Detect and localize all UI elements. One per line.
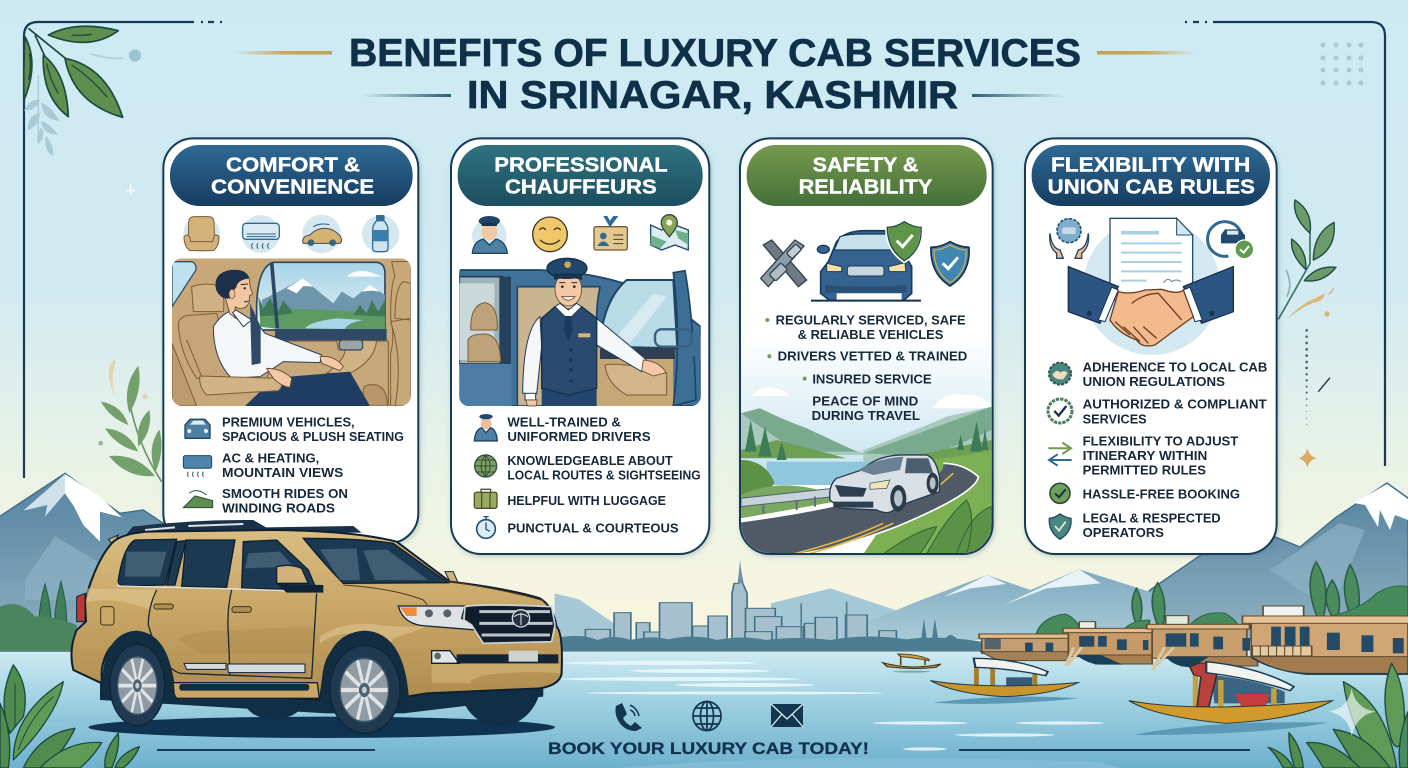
card 4 header: [1032, 145, 1270, 206]
bullet: luggage: [474, 489, 666, 508]
card 3 list: & RELIABLE VEHICLES: [798, 327, 943, 342]
left mountain: [0, 473, 173, 653]
card 4 header: FLEXIBILITY WITH: [1051, 153, 1250, 176]
large shikara: [1129, 662, 1332, 735]
card 1 header: [170, 145, 413, 206]
bullet: legal: LEGAL & RESPECTED: [1083, 511, 1221, 526]
bullet: hassle-free: [1050, 483, 1240, 503]
card 3 header: [747, 145, 987, 206]
bullet: premium vehicles: [185, 415, 404, 444]
card 4 header: UNION CAB RULES: [1048, 175, 1255, 198]
bullet: smooth rides: SMOOTH RIDES ON: [222, 486, 348, 501]
card 1 header: COMFORT &: [226, 153, 360, 176]
card 4 list: [1048, 360, 1268, 540]
icon: globe: [693, 701, 721, 730]
card 1: comfort and convenience: [163, 138, 418, 543]
blue shield icon: [931, 242, 969, 286]
right sprig and accents: [1278, 200, 1336, 468]
white sedan on road: [830, 455, 940, 513]
card 2 header: CHAUFFEURS: [505, 175, 657, 198]
bullet: authorized: SERVICES: [1083, 411, 1147, 426]
luxury SUV: [71, 520, 562, 738]
card 3 list: DRIVERS VETTED & TRAINED: [778, 349, 968, 364]
card 1 header: CONVENIENCE: [211, 175, 374, 198]
bullet: flexibility arrows: [1048, 434, 1238, 477]
bullet: authorized: AUTHORIZED & COMPLIANT: [1083, 397, 1267, 412]
card 4: flexibility with union cab rules: [1025, 138, 1277, 554]
suv front grille and lights: [398, 605, 560, 683]
bullet: knowledgeable: LOCAL ROUTES & SIGHTSEEING: [507, 467, 701, 482]
top-left leaves: [24, 26, 141, 194]
lake: [0, 652, 1408, 768]
card 2 header: PROFESSIONAL: [494, 153, 668, 176]
bullet: authorized: [1048, 397, 1267, 426]
title: BENEFITS OF LUXURY CAB SERVICES: [349, 32, 1081, 75]
bullet: ac and heating: AC & HEATING,: [222, 450, 319, 465]
card 3 list: PEACE OF MIND: [812, 394, 919, 409]
bullet: flexibility arrows: PERMITTED RULES: [1083, 462, 1206, 477]
bullet: ac and heating: [183, 450, 343, 480]
card 1 cabin illustration: [172, 258, 411, 406]
bullet: adherence: ADHERENCE TO LOCAL CAB: [1083, 360, 1268, 375]
card 1 icon row: [183, 215, 399, 253]
bullet: knowledgeable: [475, 453, 701, 482]
bullet: premium vehicles: PREMIUM VEHICLES,: [222, 415, 355, 430]
shikara boats: [883, 654, 1332, 735]
card 2 chauffeur illustration: [459, 258, 701, 406]
bullet: adherence: UNION REGULATIONS: [1083, 374, 1225, 389]
card 2 icon row: [472, 215, 688, 253]
bullet: smooth rides: [183, 486, 348, 515]
chauffeur figure: [523, 258, 666, 406]
bullet: punctual: [477, 517, 679, 538]
houseboats: [979, 562, 1408, 675]
card 3 header: SAFETY &: [813, 153, 918, 176]
bullet: well-trained: UNIFORMED DRIVERS: [507, 429, 651, 444]
suv rear wheel: [102, 631, 175, 726]
right mountains: [1110, 483, 1408, 640]
card 3 header: RELIABILITY: [799, 175, 933, 198]
card 3 list: [765, 313, 968, 423]
bullet: flexibility arrows: FLEXIBILITY TO ADJUST: [1083, 434, 1238, 449]
card 3 list: REGULARLY SERVICED, SAFE: [776, 313, 966, 328]
icon: phone: [615, 703, 642, 731]
small shikara: [883, 654, 941, 673]
left mid sprig: [98, 360, 162, 482]
bullet: flexibility arrows: ITINERARY WITHIN: [1083, 448, 1207, 463]
union hands icon: [1050, 219, 1089, 258]
bullet: well-trained: [474, 414, 651, 444]
booking text: BOOK YOUR LUXURY CAB TODAY!: [548, 739, 869, 758]
bullet: luggage: HELPFUL WITH LUGGAGE: [507, 493, 666, 508]
bullet: hassle-free: HASSLE-FREE BOOKING: [1083, 486, 1240, 501]
card 3: safety and reliability: [740, 138, 993, 554]
bullet: adherence: [1049, 360, 1268, 389]
suv front wheel: [321, 631, 409, 733]
title: IN SRINAGAR, KASHMIR: [467, 74, 958, 117]
left trees and hills: [0, 582, 77, 652]
card 2 header: [458, 145, 703, 206]
call to action: [157, 701, 1250, 758]
seatbelt icon: [761, 240, 807, 287]
bottom-left foliage: [0, 665, 139, 768]
card 2 list: [474, 414, 701, 538]
skyline and far mountains: [555, 560, 1155, 652]
card 3 list: INSURED SERVICE: [812, 371, 932, 386]
bullet: premium vehicles: SPACIOUS & PLUSH SEATING: [222, 429, 404, 444]
bullet: smooth rides: WINDING ROADS: [222, 500, 335, 515]
decorative dot grid: [1320, 42, 1364, 86]
card 2: professional chauffeurs: [451, 138, 709, 554]
bullet: punctual: PUNCTUAL & COURTEOUS: [507, 520, 679, 535]
decorative frame: [24, 22, 1385, 478]
bullet: well-trained: WELL-TRAINED &: [507, 415, 621, 430]
title: [235, 32, 1195, 117]
medium shikara: [930, 658, 1079, 704]
sedan icon with shield: [811, 221, 922, 301]
bullet: legal: OPERATORS: [1083, 525, 1164, 540]
bottom-right foliage: [1268, 663, 1408, 768]
card 3 list: DURING TRAVEL: [812, 408, 920, 423]
card 3 landscape illustration: [741, 337, 993, 554]
bullet: knowledgeable: KNOWLEDGEABLE ABOUT: [507, 453, 673, 468]
car compliance icon: [1208, 222, 1254, 259]
card 1 list: [183, 415, 404, 515]
icon: envelope: [771, 704, 803, 727]
bullet: legal: [1049, 511, 1221, 540]
bullet: ac and heating: MOUNTAIN VIEWS: [222, 465, 343, 480]
contract and handshake: [1068, 218, 1233, 355]
